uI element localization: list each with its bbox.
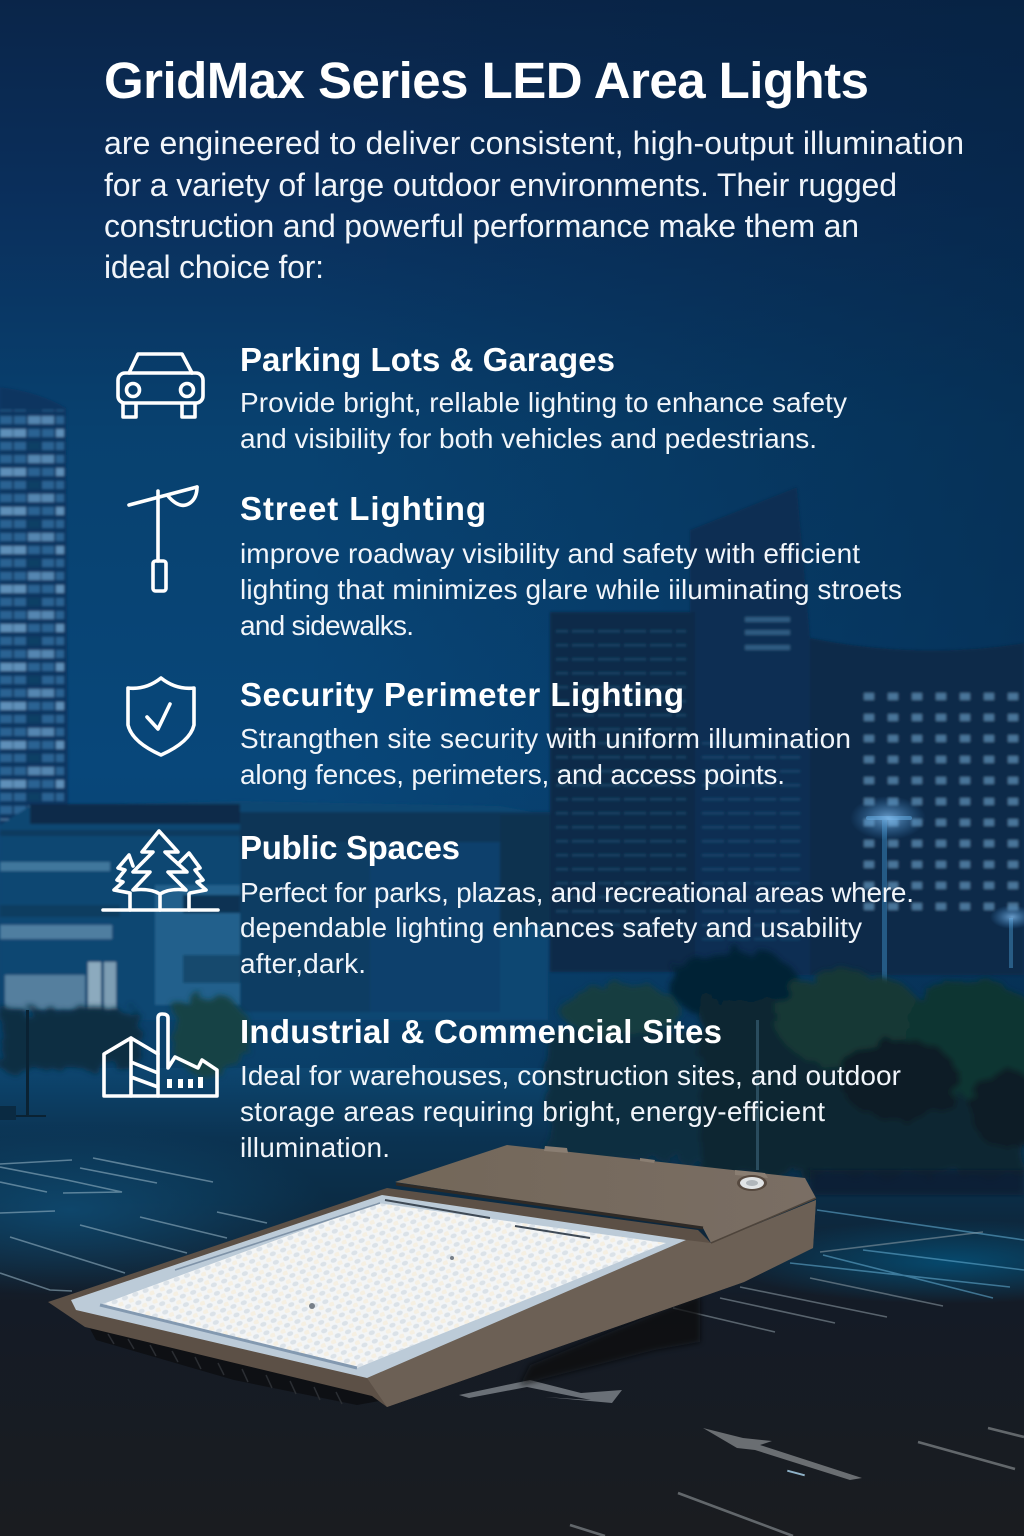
item: street lighting: lighting that minimizes glare while iiluminating stroets	[240, 574, 902, 605]
body	[48, 1188, 816, 1407]
diffuser	[100, 1203, 666, 1368]
street lamp glow	[882, 820, 887, 985]
lens frame	[71, 1195, 686, 1378]
rear panel	[395, 1145, 816, 1243]
item: industrial and commercial sites: Ideal for warehouses, construction sites, and outdoor	[240, 1060, 901, 1091]
title: GridMax Series LED Area Lights	[104, 52, 869, 109]
item: public spaces	[240, 829, 914, 979]
trees left	[0, 995, 250, 1075]
intro text	[104, 125, 964, 285]
item: parking lots and garages	[240, 341, 847, 454]
intro text: ideal choice for:	[104, 249, 324, 285]
item: street lighting: Street Lighting	[240, 490, 486, 527]
icon: shield	[128, 678, 194, 755]
item: industrial and commercial sites: illumination.	[240, 1132, 390, 1163]
icon: car	[118, 354, 203, 417]
trees right	[550, 950, 1024, 1175]
item: parking lots and garages: Parking Lots & Garages	[240, 341, 615, 378]
item: security perimeter lighting: Strangthen site security with uniform illumination	[240, 723, 851, 754]
item: public spaces: after,dark.	[240, 948, 366, 979]
item: industrial and commercial sites	[240, 1013, 901, 1163]
intro text: are engineered to deliver consistent, high-output illumination	[104, 125, 964, 161]
lamp shadow	[520, 1295, 700, 1385]
dark band under right trees	[810, 1170, 1024, 1195]
item: security perimeter lighting: along fences, perimeters, and access points.	[240, 759, 785, 790]
intro text: construction and powerful performance make them an	[104, 208, 859, 244]
ground	[0, 1068, 1024, 1536]
item: public spaces: Perfect for parks, plazas, and recreational areas where.	[240, 877, 914, 908]
product: LED area light	[48, 1145, 816, 1407]
item: security perimeter lighting: Security Perimeter Lighting	[240, 676, 684, 713]
icon: street light	[129, 487, 197, 591]
item: public spaces: Public Spaces	[240, 829, 460, 866]
item: industrial and commercial sites: Industrial & Commencial Sites	[240, 1013, 722, 1050]
heat-sink fins	[88, 1318, 385, 1405]
icon: factory	[104, 1014, 217, 1096]
intro text: for a variety of large outdoor environments. Their rugged	[104, 167, 897, 203]
item: parking lots and garages: Provide bright, rellable lighting to enhance safety	[240, 387, 847, 418]
item: public spaces: dependable lighting enhances safety and usability	[240, 912, 862, 943]
road arrows	[459, 1380, 622, 1403]
item: parking lots and garages: and visibility for both vehicles and pedestrians.	[240, 423, 817, 454]
buildings	[0, 387, 1024, 1020]
parking lines	[0, 1158, 267, 1291]
icon: trees	[103, 831, 218, 910]
item: security perimeter lighting	[240, 676, 851, 790]
item: industrial and commercial sites: storage areas requiring bright, energy-efficient	[240, 1096, 825, 1127]
item: street lighting: improve roadway visibility and safety with efficient	[240, 538, 860, 569]
item: street lighting	[240, 490, 902, 641]
item: street lighting: and sidewalks.	[240, 610, 414, 641]
sensor	[737, 1175, 767, 1191]
